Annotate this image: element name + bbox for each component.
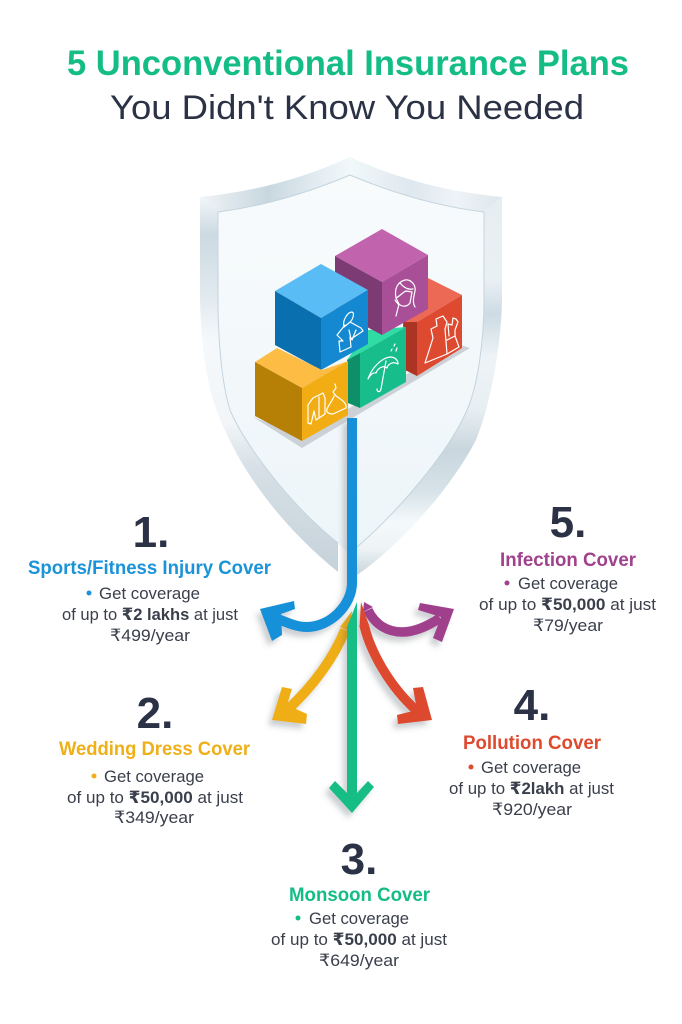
icon: suit and dress [308, 384, 346, 424]
icon: injured arm [337, 312, 363, 352]
arrow 2: yellow [272, 611, 352, 724]
item 4: pollution cover: Pollution Cover [463, 733, 602, 754]
item 3: monsoon cover: Monsoon Cover [289, 885, 431, 906]
title [67, 44, 629, 127]
block: infection (purple) [335, 229, 428, 335]
item 3: monsoon cover [271, 835, 447, 970]
arrow 4: red [360, 602, 432, 724]
title: 5 Unconventional Insurance Plans [67, 44, 629, 83]
item 1: sports/fitness injury cover: 1. [133, 508, 169, 557]
item 4: pollution cover: Get coverage [481, 758, 581, 777]
platform [253, 344, 470, 448]
item 5: infection cover [479, 498, 656, 635]
item 4: pollution cover: 4. [514, 681, 550, 730]
item 5: infection cover: 5. [550, 498, 586, 547]
icon: factory smoke [425, 316, 459, 363]
item 4: pollution cover: ₹920/year [492, 800, 572, 819]
arrow 1: blue [260, 418, 352, 641]
item 3: monsoon cover: Get coverage [309, 909, 409, 928]
arrow 5: purple [363, 602, 454, 642]
block: sports (blue) [275, 264, 368, 370]
item 2: wedding dress cover: ₹349/year [114, 808, 194, 827]
item 1: sports/fitness injury cover: ₹499/year [110, 626, 190, 645]
item 4: pollution cover: of up to ₹2lakh at just [449, 779, 614, 798]
block: wedding (yellow) [255, 348, 348, 441]
item 1: sports/fitness injury cover: of up to ₹2 lakhs at just [62, 605, 238, 624]
item 5: infection cover: of up to ₹50,000 at just [479, 595, 656, 614]
icon: masked face [395, 280, 415, 316]
item 5: infection cover: Get coverage [518, 574, 618, 593]
item 2: wedding dress cover [59, 689, 251, 827]
item 1: sports/fitness injury cover: Sports/Fitness Injury Cover [28, 558, 272, 579]
item 5: infection cover: ₹79/year [533, 616, 603, 635]
item 2: wedding dress cover: Wedding Dress Cover [59, 739, 251, 760]
arrow 3: green [329, 602, 374, 813]
icon: umbrella [368, 344, 398, 392]
item 1: sports/fitness injury cover [28, 508, 272, 645]
block: pollution (red) [403, 278, 462, 376]
item 3: monsoon cover: ₹649/year [319, 951, 399, 970]
item 2: wedding dress cover: 2. [137, 689, 173, 738]
item 1: sports/fitness injury cover: Get coverage [99, 584, 200, 603]
item 5: infection cover: Infection Cover [500, 550, 637, 571]
item 2: wedding dress cover: Get coverage [104, 767, 204, 786]
item 2: wedding dress cover: of up to ₹50,000 at just [67, 788, 243, 807]
block: monsoon (green) [347, 327, 406, 408]
item 3: monsoon cover: of up to ₹50,000 at just [271, 930, 447, 949]
item 3: monsoon cover: 3. [341, 835, 377, 884]
title: You Didn't Know You Needed [110, 89, 584, 127]
blocks with icons [253, 229, 470, 448]
shield [200, 157, 502, 575]
item 4: pollution cover [449, 681, 614, 819]
